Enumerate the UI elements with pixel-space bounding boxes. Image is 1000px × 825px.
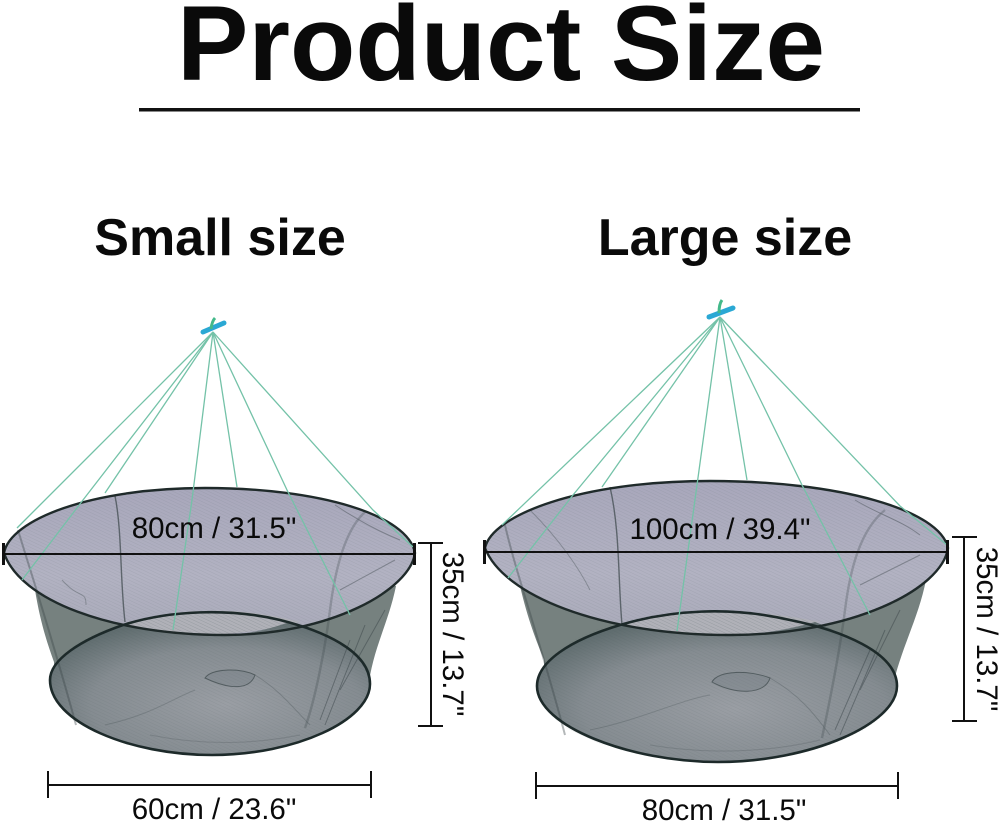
bottom ring	[50, 612, 370, 755]
dimension: small top diameter: 80cm / 31.5"	[132, 512, 296, 545]
dimension: large top diameter: 100cm / 39.4"	[629, 513, 811, 546]
net side wall	[520, 555, 926, 690]
heading: large size: Large size	[598, 209, 852, 267]
rim interior	[4, 488, 415, 635]
title underline	[139, 108, 860, 112]
panel: small net	[4, 318, 415, 755]
dimension: small height: 35cm / 13.7"	[436, 552, 469, 716]
net folds	[18, 496, 400, 742]
net side wall	[35, 560, 396, 690]
bottom ring	[537, 611, 897, 762]
top rim	[485, 481, 948, 635]
hanging strings	[502, 317, 947, 631]
net lens between rings	[123, 610, 300, 634]
top rim	[4, 488, 415, 635]
icon: blue hanging clip	[203, 318, 224, 332]
bottom net floor	[50, 622, 370, 755]
rim interior	[485, 481, 948, 635]
dimension: small top diameter	[2, 512, 416, 565]
icon: blue hanging clip	[709, 300, 733, 317]
panel: large net	[485, 300, 948, 762]
hanging strings	[17, 332, 413, 630]
mesh texture	[4, 488, 415, 754]
dimension: large top diameter	[483, 513, 949, 564]
heading: small size: Small size	[94, 209, 346, 267]
mesh texture	[485, 481, 948, 762]
net folds	[505, 487, 920, 751]
bottom net floor	[537, 622, 897, 762]
net lens between rings	[620, 612, 820, 634]
